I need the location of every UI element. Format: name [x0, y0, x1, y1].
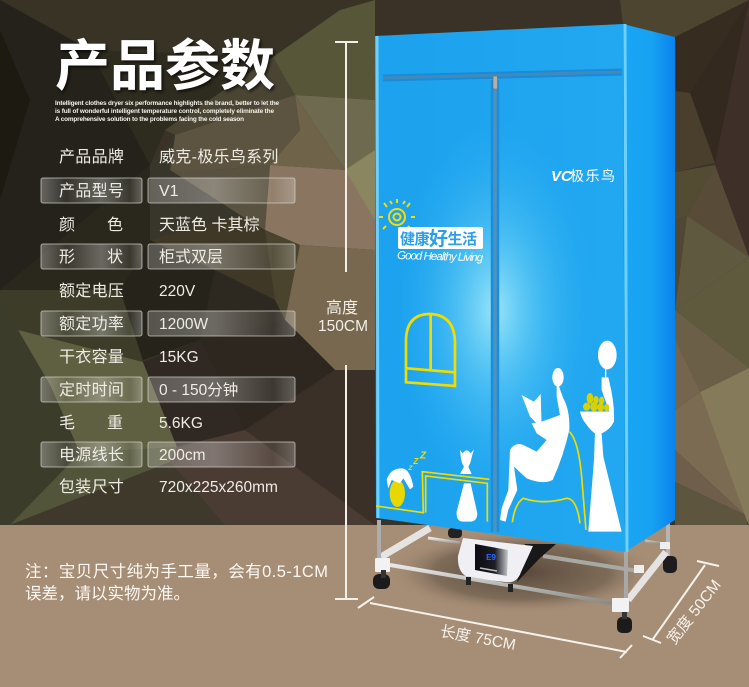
caster back left [448, 528, 462, 538]
horizontal zipper [383, 72, 622, 78]
front panel glow [375, 24, 625, 552]
row: power: 额定功率 [59, 315, 124, 333]
slogan badge: 生活 [448, 231, 477, 248]
row: colour: 天蓝色 卡其棕 [159, 216, 259, 234]
caster front right [617, 612, 632, 633]
row: capacity: 干衣容量 [59, 348, 124, 366]
english intro text: A comprehensive solution to the problems facing the cold season [55, 116, 244, 123]
row: capacity: 15KG [159, 349, 199, 366]
note: 注：宝贝尺寸纯为手工量，会有0.5-1CM [25, 562, 328, 581]
row: model [41, 178, 295, 203]
cat [460, 449, 474, 474]
window [406, 314, 455, 386]
control unit: E9 [486, 553, 496, 562]
brand logo: VC [551, 168, 573, 185]
row: model: 产品型号 [59, 182, 124, 200]
row: package: 720x225x260mm [159, 479, 278, 496]
slogan badge: 好 [429, 228, 448, 250]
front panel [375, 24, 625, 552]
row: model: V1 [159, 183, 179, 200]
parameter table [41, 148, 295, 496]
control unit [458, 538, 533, 582]
row: capacity [59, 348, 199, 366]
row: weight: 毛 [59, 414, 75, 432]
slogan english: Good Healthy Living [397, 250, 484, 264]
brand logo: 极乐鸟 [570, 168, 616, 184]
rack frame front [373, 520, 632, 633]
row: cable: 电源线长 [59, 446, 124, 464]
english intro text: Intelligent clothes dryer six performance highlights the brand, better to let the [55, 100, 279, 107]
height dimension: 高度 [326, 299, 358, 317]
row: package: 包装尺寸 [59, 478, 124, 496]
row: power [41, 311, 295, 336]
slogan badge [398, 227, 483, 250]
width dimension: 宽度 50CM [663, 576, 725, 648]
zzz: Z [419, 451, 427, 462]
sun icon [379, 199, 415, 229]
zzz: Z [412, 457, 419, 466]
row: timer: 0 - 150分钟 [159, 381, 238, 399]
height dimension [318, 42, 368, 599]
woman head [598, 341, 617, 378]
note: 误差，请以实物为准。 [25, 584, 190, 603]
row: brand [59, 148, 279, 166]
zipper pull [493, 76, 498, 89]
polygon background [0, 0, 749, 530]
row: timer [41, 377, 295, 402]
fireplace [376, 472, 489, 522]
row: cable: 200cm [159, 447, 206, 464]
side panel [623, 24, 675, 552]
english intro text [55, 100, 279, 123]
length dimension [358, 597, 632, 658]
brand logo [551, 168, 616, 185]
length dimension: 长度 75CM [439, 622, 517, 654]
row: colour [59, 216, 259, 234]
black wedge [517, 544, 556, 582]
row: brand: 威克-极乐鸟系列 [159, 148, 279, 166]
floor band [0, 525, 749, 687]
zzz: Z [407, 465, 413, 472]
row: weight [59, 414, 203, 432]
book [522, 394, 542, 427]
fireplace vase [457, 483, 477, 522]
note [25, 562, 328, 603]
row: voltage: 额定电压 [59, 282, 124, 300]
zzz [407, 451, 427, 472]
dryer cabinet [375, 24, 675, 552]
row: package [59, 478, 278, 496]
row: brand: 产品品牌 [59, 148, 124, 166]
vertical zipper [491, 80, 499, 532]
row: colour: 色 [107, 216, 123, 234]
flower [387, 468, 413, 489]
woman [580, 377, 622, 532]
caster front left [373, 570, 390, 589]
rack frame back [381, 520, 677, 600]
width dimension [643, 561, 725, 648]
corner highlights [377, 24, 627, 552]
caster back right [663, 556, 677, 573]
illustration [376, 314, 622, 532]
row: voltage [59, 282, 196, 300]
row: weight: 重 [107, 414, 123, 432]
row: shape: 柜式双层 [159, 248, 223, 266]
floor shadow [387, 530, 657, 614]
row: power: 1200W [159, 316, 208, 333]
row: shape [41, 244, 295, 269]
fruit [583, 393, 609, 412]
title: 产品参数 [55, 21, 275, 101]
english intro text: is full of wonderful intelligent temperature control, completely eliminate the [55, 108, 274, 115]
height dimension: 150CM [318, 318, 368, 335]
row: colour: 颜 [59, 216, 75, 234]
row: weight: 5.6KG [159, 415, 203, 432]
vase [390, 480, 405, 507]
row: cable [41, 442, 295, 467]
row: shape: 状 [107, 248, 123, 266]
row: timer: 定时时间 [59, 381, 124, 399]
row: voltage: 220V [159, 283, 196, 300]
reader [500, 380, 569, 522]
row: shape: 形 [59, 248, 75, 266]
bowl [580, 412, 610, 428]
reader head [552, 368, 564, 387]
slogan badge: 健康 [400, 231, 429, 248]
chair [512, 432, 586, 530]
